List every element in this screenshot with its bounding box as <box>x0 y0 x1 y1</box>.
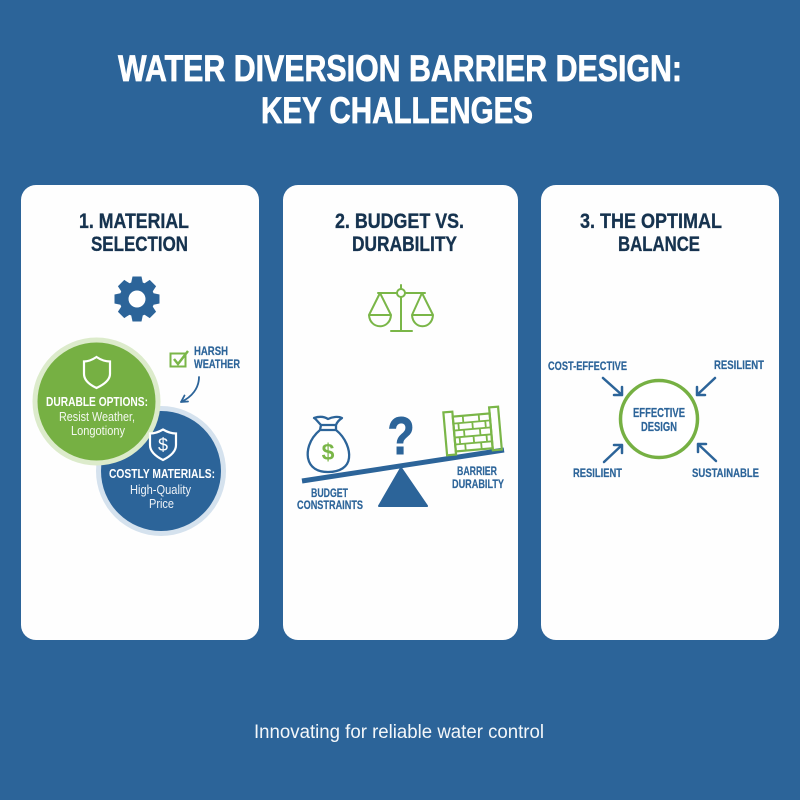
label: barrier durability: DURABILTY <box>452 477 504 491</box>
heading: budget vs durability: 2. BUDGET VS. <box>335 210 464 233</box>
label: harsh weather: HARSH <box>194 344 228 358</box>
label: resilient top: RESILIENT <box>714 358 765 372</box>
label: budget constraints: BUDGET <box>311 486 348 500</box>
effective design circle: EFFECTIVE <box>633 406 685 420</box>
icon: dollar shield <box>150 430 176 460</box>
label: barrier durability <box>452 464 504 491</box>
heading: material selection: SELECTION <box>91 233 188 256</box>
heading: the optimal balance <box>580 210 722 256</box>
heading: the optimal balance: 3. THE OPTIMAL <box>580 210 722 233</box>
icon: gear <box>114 276 160 322</box>
text: costly materials: Price <box>149 496 174 511</box>
footer tagline: Innovating for reliable water control <box>254 722 544 743</box>
label: resilient bottom: RESILIENT <box>573 466 623 480</box>
effective design circle <box>620 380 698 458</box>
circle: costly materials <box>96 406 226 536</box>
panel: budget vs durability <box>283 185 518 640</box>
label: barrier durability: BARRIER <box>457 464 497 478</box>
circle: durable options <box>32 338 160 466</box>
label: sustainable: SUSTAINABLE <box>692 466 759 480</box>
label: budget constraints: CONSTRAINTS <box>297 498 363 512</box>
heading: the optimal balance: BALANCE <box>618 233 700 256</box>
text: costly materials <box>109 466 215 511</box>
icon: balance scales <box>369 285 433 331</box>
icon: green checkbox <box>170 351 188 366</box>
label: harsh weather: WEATHER <box>194 357 240 371</box>
icon: shield <box>84 357 110 388</box>
title: WATER DIVERSION BARRIER DESIGN: <box>118 48 682 89</box>
icon: brick barrier <box>443 407 502 455</box>
title <box>118 48 682 131</box>
heading: material selection <box>79 210 189 256</box>
text: durable options: Resist Weather, <box>59 410 135 424</box>
card background 3 <box>541 185 779 640</box>
effective design circle: DESIGN <box>641 420 677 434</box>
text: durable options: Longotiony <box>71 424 126 438</box>
icon: dollar shield: $ <box>158 435 168 455</box>
label: harsh weather <box>194 344 240 371</box>
text: costly materials: High-Quality <box>130 482 191 497</box>
panel: material selection <box>21 185 259 640</box>
title: KEY CHALLENGES <box>261 90 533 131</box>
icon: seesaw <box>302 450 504 506</box>
card background 1 <box>21 185 259 640</box>
text: durable options: DURABLE OPTIONS: <box>46 394 148 409</box>
card background 2 <box>283 185 518 640</box>
icon: money bag <box>308 417 349 472</box>
heading: material selection: 1. MATERIAL <box>79 210 189 233</box>
icon: question mark: ? <box>388 407 414 466</box>
arrow: harsh weather to circles <box>181 377 199 402</box>
text: costly materials: COSTLY MATERIALS: <box>109 466 215 481</box>
arrows pointing to centre <box>603 378 716 462</box>
icon: money bag: $ <box>322 439 335 465</box>
label: cost-effective: COST-EFFECTIVE <box>548 359 627 373</box>
heading: budget vs durability: DURABILITY <box>352 233 457 256</box>
label: budget constraints <box>297 486 363 512</box>
heading: budget vs durability <box>335 210 464 256</box>
text: durable options <box>46 394 148 438</box>
panel: the optimal balance <box>541 185 779 640</box>
